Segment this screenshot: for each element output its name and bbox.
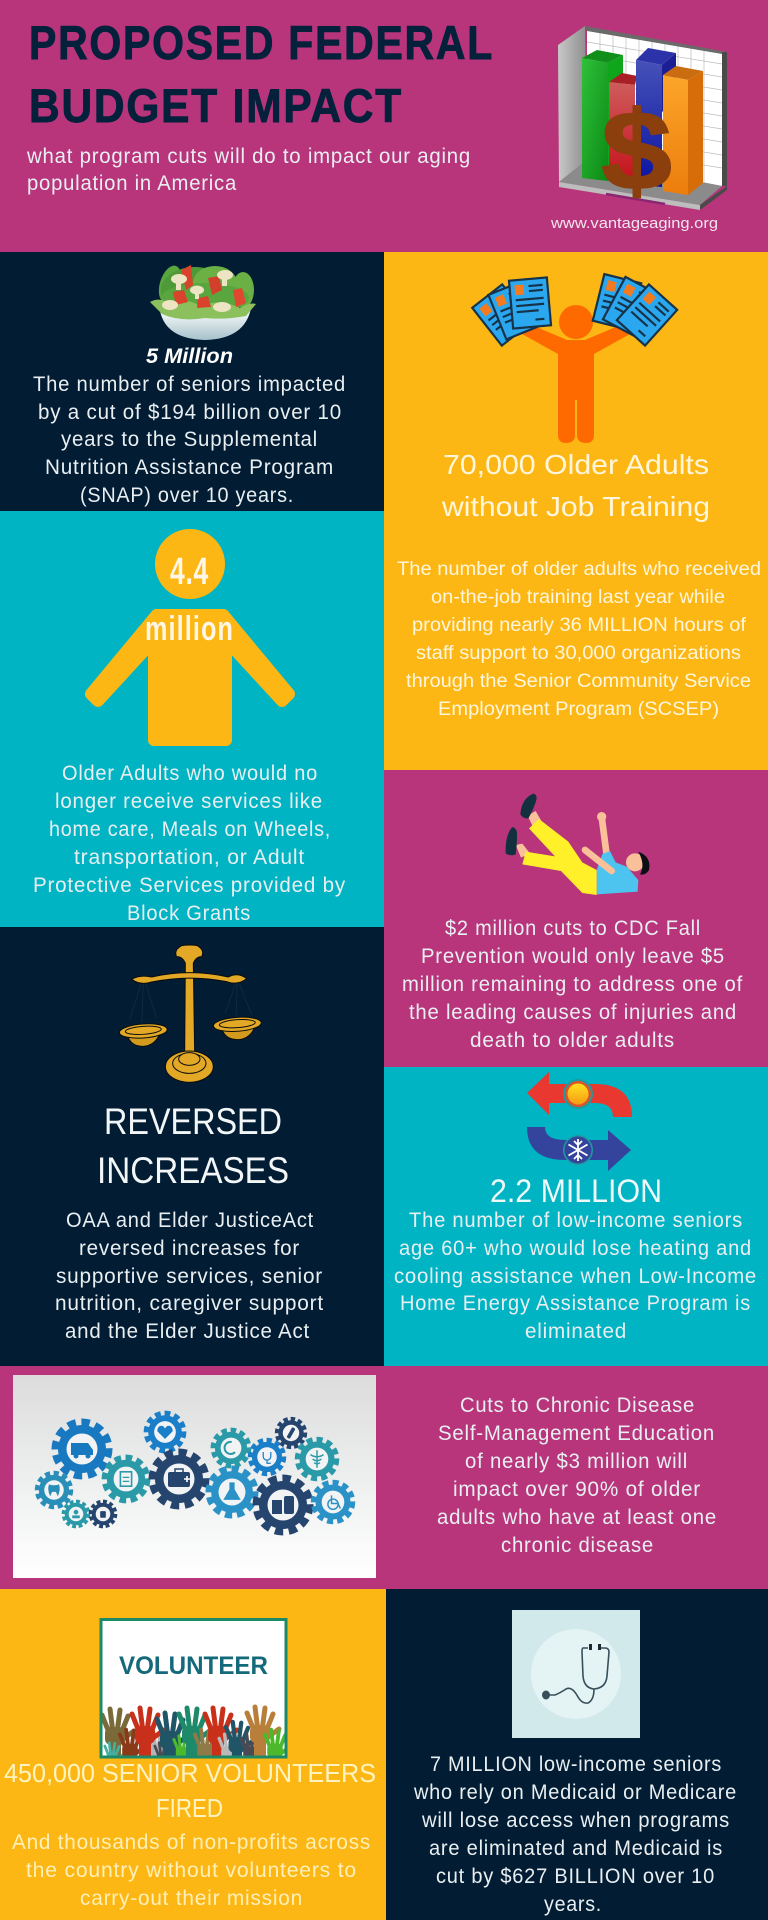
heading: senior volunteers fired: 450,000 SENIOR VOLUNTEERS (4, 1758, 376, 1788)
text: medicaid description: years. (544, 1893, 602, 1916)
subtitle (26, 145, 471, 195)
text: block grants description: home care, Meals on Wheels, (49, 818, 331, 841)
text: job training description: The number of older adults who received (397, 559, 761, 580)
text: LIHEAP description: Home Energy Assistance Program is (400, 1292, 751, 1315)
text: medicaid description: will lose access when programs (421, 1809, 730, 1832)
text: fall prevention description: death to older adults (470, 1029, 675, 1052)
text: fall prevention description: $2 million cuts to CDC Fall (445, 917, 701, 940)
image: volunteer hands: VOLUNTEER (119, 1652, 268, 1680)
panel: heating and cooling assistance (384, 1067, 768, 1366)
text: reversed increases description (55, 1209, 324, 1343)
text: job training description: on-the-job training last year while (431, 587, 725, 608)
text: job training description: providing nearly 36 MILLION hours of (412, 615, 747, 636)
heading: reversed increases: REVERSED (104, 1101, 282, 1142)
text: block grants description: Block Grants (127, 902, 251, 925)
icon: bar chart with dollar sign: $ (601, 88, 672, 213)
icon: person holding resumes (472, 274, 677, 443)
text: volunteers description: And thousands of non-profits across (12, 1831, 371, 1854)
text: LIHEAP description: eliminated (525, 1320, 627, 1343)
heading: reversed increases (97, 1101, 289, 1191)
text: chronic disease description (437, 1394, 717, 1557)
website url: www.vantageaging.org (550, 215, 718, 232)
text: SNAP description: years to the Supplemental (61, 428, 318, 451)
text: reversed increases description: reversed increases for (79, 1237, 300, 1260)
text: medicaid description: 7 MILLION low-income seniors (430, 1753, 722, 1776)
icon: person with 4.4 million: million (145, 610, 234, 648)
panel: SNAP cuts (0, 252, 384, 511)
text: volunteers description: carry-out their mission (80, 1887, 303, 1910)
panel: medicaid cuts (386, 1589, 768, 1920)
text: LIHEAP description: The number of low-income seniors (409, 1209, 743, 1232)
text: LIHEAP description: cooling assistance when Low-Income (394, 1265, 757, 1288)
title: PROPOSED FEDERAL (29, 16, 494, 69)
text: SNAP description (33, 373, 346, 507)
icon: stethoscope (512, 1610, 640, 1738)
text: block grants description: longer receive services like (55, 790, 323, 813)
text: SNAP description: by a cut of $194 billion over 10 (38, 401, 342, 424)
text: LIHEAP description: age 60+ who would lose heating and (399, 1237, 752, 1260)
text: chronic disease description: adults who have at least one (437, 1506, 717, 1529)
text: fall prevention description: million remaining to address one of (402, 973, 743, 996)
heading: 70,000 older adults (441, 449, 710, 522)
text: block grants description: Protective Services provided by (33, 874, 346, 897)
panel: header (0, 0, 768, 252)
text: job training description: staff support to 30,000 organizations (416, 643, 741, 664)
text: medicaid description: are eliminated and Medicaid is (429, 1837, 723, 1860)
subtitle: population in America (27, 172, 237, 195)
icon: salad bowl (150, 263, 256, 340)
icon: bar chart with dollar sign (558, 26, 727, 213)
text: reversed increases description: and the Elder Justice Act (65, 1320, 310, 1343)
heading: reversed increases: INCREASES (97, 1150, 289, 1191)
panel: job training (384, 252, 768, 770)
icon: person with 4.4 million (91, 529, 289, 740)
heading: 70,000 older adults: without Job Training (441, 491, 710, 522)
text: block grants description: transportation, or Adult (74, 846, 305, 869)
icon: falling man (506, 794, 649, 895)
text: reversed increases description: OAA and Elder JusticeAct (66, 1209, 314, 1232)
text: job training description: through the Senior Community Service (406, 671, 751, 692)
heading: 70,000 older adults: 70,000 Older Adults (443, 449, 709, 480)
subtitle: what program cuts will do to impact our aging (26, 145, 471, 168)
text: reversed increases description: supportive services, senior (56, 1265, 323, 1288)
text: chronic disease description: Cuts to Chronic Disease (460, 1394, 695, 1417)
icon: person with 4.4 million: 4.4 (170, 551, 209, 593)
text: fall prevention description: Prevention would only leave $5 (421, 945, 725, 968)
text: block grants description: Older Adults who would no (62, 762, 318, 785)
image: volunteer hands (100, 1618, 288, 1758)
text: medicaid description: cut by $627 BILLION over 10 (436, 1865, 715, 1888)
text: job training description (397, 559, 761, 720)
text: medicaid description: who rely on Medicaid or Medicare (413, 1781, 737, 1804)
panel: fall prevention (384, 770, 768, 1067)
text: chronic disease description: of nearly $3 million will (465, 1450, 688, 1473)
text: chronic disease description: impact over 90% of older (453, 1478, 701, 1501)
text: volunteers description (12, 1831, 371, 1910)
text: fall prevention description: the leading causes of injuries and (409, 1001, 737, 1024)
image: medical gears (13, 1375, 376, 1578)
text: job training description: Employment Program (SCSEP) (438, 699, 719, 720)
text: chronic disease description: chronic disease (501, 1534, 654, 1557)
text: block grants description (33, 762, 346, 925)
panel: chronic disease (0, 1366, 768, 1589)
text: SNAP description: Nutrition Assistance Program (45, 456, 334, 479)
heading: senior volunteers fired (4, 1758, 376, 1823)
title: BUDGET IMPACT (29, 79, 403, 132)
text: LIHEAP description (394, 1209, 757, 1343)
panel: senior volunteers (0, 1589, 386, 1920)
heading: senior volunteers fired: FIRED (156, 1793, 223, 1823)
text: volunteers description: the country without volunteers to (26, 1859, 357, 1882)
panel: block grants (0, 511, 384, 927)
heading: 2.2 million: 2.2 MILLION (490, 1173, 662, 1209)
text: reversed increases description: nutrition, caregiver support (55, 1292, 324, 1315)
icon: scales of justice (119, 945, 262, 1082)
panel: reversed increases (0, 927, 384, 1366)
title (29, 16, 494, 132)
stat: 5 Million: 5 Million (146, 345, 233, 368)
text: SNAP description: The number of seniors impacted (33, 373, 346, 396)
text: SNAP description: (SNAP) over 10 years. (80, 484, 294, 507)
icon: hot and cold arrows (527, 1072, 632, 1171)
text: fall prevention description (402, 917, 743, 1052)
text: medicaid description (413, 1753, 737, 1916)
text: chronic disease description: Self-Management Education (438, 1422, 715, 1445)
